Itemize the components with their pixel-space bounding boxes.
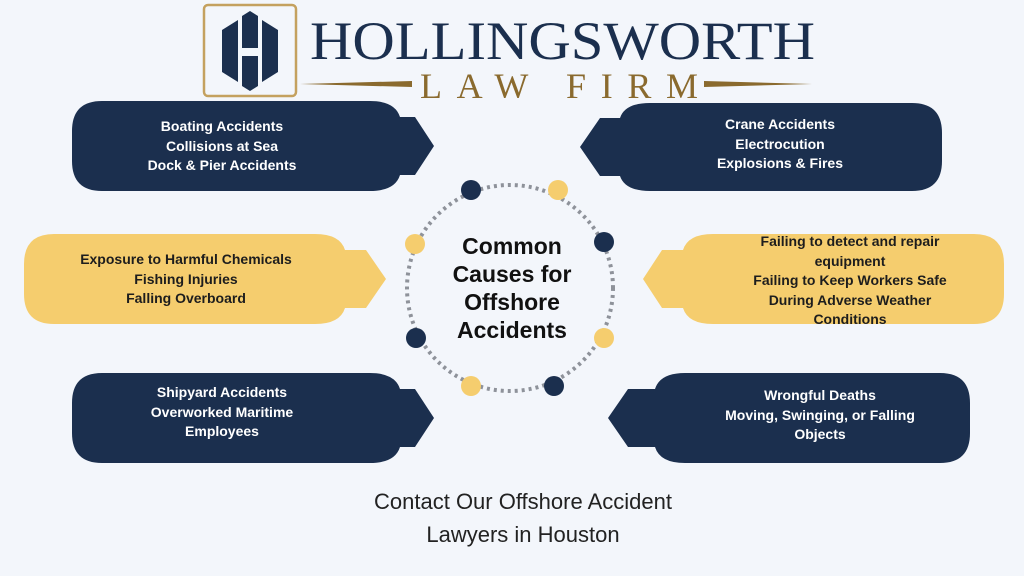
footer text: Contact Our Offshore Accident: [374, 489, 672, 514]
center title: Causes for: [453, 261, 571, 287]
center title: Offshore: [464, 289, 560, 315]
text: bottom left: Shipyard Accidents: [157, 384, 287, 400]
text: bottom right: Objects: [794, 426, 846, 442]
text: top right: Explosions & Fires: [717, 155, 843, 171]
text: top right: Electrocution: [735, 136, 825, 152]
text: middle right: Failing to Keep Workers Safe: [753, 272, 947, 288]
panel shape: middle left: [24, 234, 386, 324]
text: middle right: During Adverse Weather: [769, 292, 931, 308]
panel shape: bottom left: [72, 373, 434, 463]
text: bottom right: Moving, Swinging, or Falling: [725, 406, 915, 422]
text: top right: Crane Accidents: [725, 116, 835, 132]
text: top left: Collisions at Sea: [166, 138, 278, 154]
text: middle right: Failing to detect and repair: [761, 233, 939, 249]
firm name: HOLLINGSWORTH: [310, 11, 815, 71]
subtitle: [300, 66, 812, 106]
panel shape: top left: [72, 101, 434, 191]
text: bottom left: Employees: [185, 423, 259, 439]
circle dots: [405, 180, 614, 396]
center title: Accidents: [457, 317, 567, 343]
text: middle right: equipment: [815, 252, 885, 268]
panel shape: top right: [580, 103, 942, 191]
footer text: Lawyers in Houston: [426, 522, 620, 547]
text: top left: [148, 118, 296, 173]
center title: [453, 233, 572, 343]
center title: Common: [462, 233, 562, 259]
footer text: [374, 489, 672, 547]
text: middle left: Exposure to Harmful Chemicals: [80, 251, 292, 267]
panel shape: bottom right: [608, 373, 970, 463]
dotted circle: [407, 185, 613, 391]
panel shape: middle right: [643, 234, 1004, 324]
text: middle right: Conditions: [813, 311, 887, 327]
text: middle left: Fishing Injuries: [134, 270, 238, 286]
text: middle left: [80, 251, 292, 306]
text: top left: Dock & Pier Accidents: [148, 157, 296, 173]
text: middle right: [753, 233, 947, 327]
text: bottom left: Overworked Maritime: [151, 404, 293, 420]
text: middle left: Falling Overboard: [126, 290, 246, 306]
text: top right: [717, 116, 843, 171]
text: bottom right: Wrongful Deaths: [764, 387, 876, 403]
text: bottom right: [725, 387, 915, 442]
text: bottom left: [151, 384, 293, 439]
icon: H shield: [204, 5, 296, 96]
text: top left: Boating Accidents: [161, 118, 283, 134]
logo: [202, 4, 815, 98]
